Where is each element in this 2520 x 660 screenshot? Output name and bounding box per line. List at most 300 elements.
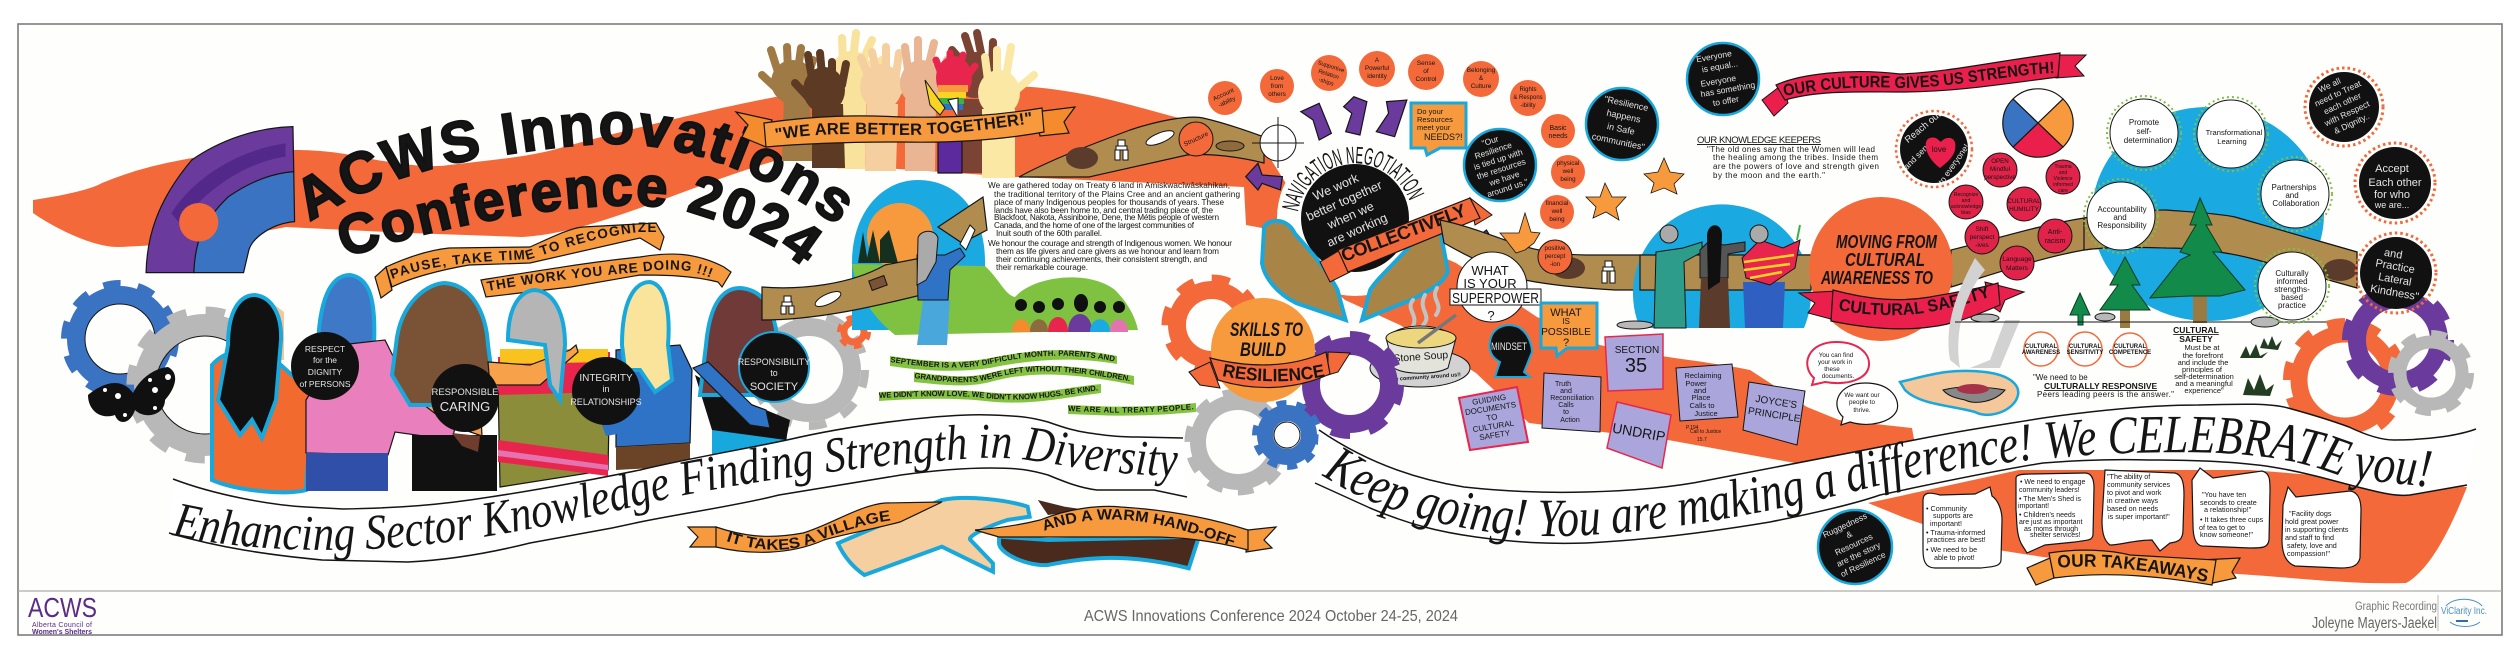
text: cultural safety definition: self-determination <box>2174 372 2234 381</box>
white circle: what is your superpower: SUPERPOWER <box>1452 290 1539 307</box>
grass tufts <box>2240 336 2282 396</box>
road segment over blue circle <box>2084 210 2357 288</box>
takeaway bubble: ability of community services: in creative ways <box>2107 496 2159 505</box>
bubble: positive perception <box>1538 240 1572 274</box>
bubble: love from others: Love <box>1270 75 1284 82</box>
footer: conference label: ACWS Innovations Conference 2024 October 24-25, 2024 <box>1084 608 1458 625</box>
bubble: trauma and violence informed care: and <box>2059 170 2067 176</box>
value: responsibility to society <box>738 332 810 402</box>
script banner: keep going: Keep going! You are making a difference! We CELEBRATE you! <box>1321 416 2432 544</box>
woman: black hair <box>212 295 385 492</box>
takeaway bubble: facility dogs: safety, love and <box>2287 541 2337 550</box>
black circle: our resilience: is tied up with <box>1472 147 1524 172</box>
hand: dark brown <box>795 53 846 167</box>
bubble: belonging and culture <box>1463 61 1499 97</box>
navigation negotiation arc text: NAVIGATION NEGOTIATION <box>1282 146 1424 212</box>
black circle: we work better together: better together <box>1304 178 1384 224</box>
value: responsibility to society: SOCIETY <box>750 381 799 393</box>
takeaway bubble: community leaders: • The Men's Shed is <box>2019 496 2082 503</box>
takeaway bubble: community supports: supports are <box>1933 511 1973 520</box>
black circle: ruggedness and resources: of Resilience <box>1839 549 1887 579</box>
ribbon: we are better together: "WE ARE BETTER TOGETHER!" <box>775 112 1031 138</box>
document: truth and reconciliation: Reconciliation <box>1550 395 1594 402</box>
value: responsibility to society: to <box>770 368 778 378</box>
takeaway bubble: community leaders: important! <box>2018 503 2049 510</box>
bubble: physical well being: being <box>1560 176 1576 183</box>
gear: purple skills <box>1300 335 1400 435</box>
hand: pink tan <box>900 40 947 170</box>
land acknowledgement text: them as life givers and care givers as we honour and learn from <box>996 247 1219 256</box>
text: cultural safety definition: and include the <box>2178 358 2228 367</box>
circle: moving from cultural awareness: CULTURAL <box>1845 250 1925 270</box>
bubble: trauma and violence informed care: Violence <box>2053 176 2073 182</box>
speech bubble: find your work: documents. <box>1822 373 1855 380</box>
document: truth and reconciliation <box>1542 373 1601 432</box>
takeaway bubble: ability of community services: to pivot and work <box>2107 488 2162 497</box>
bubble: accountability: Account <box>1212 87 1235 103</box>
takeaway bubble: ten seconds <box>2192 468 2270 548</box>
ground line with rocks <box>1617 313 2330 329</box>
bubble: supportive relationships: Supportive <box>1317 60 1345 74</box>
bubble: rights and responsibility: & Respons <box>1513 95 1543 101</box>
callout: what is possible: POSSIBLE <box>1541 327 1591 338</box>
document: undrip: UNDRIP <box>1611 420 1667 445</box>
document: guiding documents: TO <box>1486 412 1498 423</box>
bubble: cultural humility: HUMILITY <box>2009 206 2040 213</box>
footer: acws logo: Women's Shelters <box>32 629 92 636</box>
value: responsibility to society: RESPONSIBILITY <box>738 357 810 367</box>
footer: graphic recording credit: Joleyne Mayers-Jaekel <box>2312 615 2437 632</box>
note: call to justice reference: P.194 <box>1686 425 1699 431</box>
ribbon: collectively <box>1319 196 1493 283</box>
takeaway bubble: community leaders: • Children's needs <box>2019 512 2076 519</box>
circle: cultural sensitivity: SENSITIVITY <box>2067 350 2103 356</box>
bubble: shift perspectives: -ives <box>1975 242 1989 249</box>
circle: culturally informed strengths-based practice: informed <box>2276 277 2308 286</box>
document: guiding documents: DOCUMENTS <box>1464 400 1517 417</box>
stone soup bowl: and the community around us!! <box>1379 372 1461 384</box>
document: reclaiming power and place: Reclaiming <box>1684 371 1722 380</box>
steam gray band <box>1948 258 2020 368</box>
black circle: treat each other <box>2305 68 2383 146</box>
ribbon: collectively: COLLECTIVELY <box>1342 204 1463 260</box>
circle: promote self-determination: determination <box>2124 136 2172 145</box>
circle: cultural competence <box>2109 333 2151 367</box>
woman: maroon hair, blue skirt <box>693 288 790 455</box>
black circle: reach out: and send <box>1901 139 1933 171</box>
circle: cultural awareness <box>2022 332 2060 366</box>
land acknowledgement text: Blackfoot, Nakota, Assiniboine, Dene, the Métis people of western <box>994 213 1219 222</box>
bubble: rights and responsibility: -ibility <box>1520 103 1536 109</box>
black circle: ruggedness and resources: are the story <box>1835 539 1883 569</box>
three women <box>1654 225 1800 328</box>
bubble: sense of control: of <box>1423 68 1429 75</box>
takeaway bubble: ability of community services: "The ability of <box>2107 472 2150 481</box>
speech bubble: find your work: your work in <box>1818 359 1852 366</box>
land acknowledgement text: Canada, and the home of one of the largest communities of <box>994 221 1195 230</box>
black circle: we work better together: are working <box>1325 211 1390 250</box>
circle: partnerships and collaboration: and <box>2285 191 2299 200</box>
gear: blue left <box>65 284 175 394</box>
bubble: accountability: -ability <box>1217 95 1237 109</box>
black circle: resilience happens <box>1586 88 1658 160</box>
bubble: accountability <box>1208 81 1242 115</box>
blue sky circle with sun <box>852 180 1138 335</box>
circle: culturally informed strengths-based practice: Culturally <box>2275 269 2309 278</box>
circle: promote self-determination: self- <box>2136 127 2152 136</box>
bubble: shift perspectives: perspect <box>1970 234 1994 241</box>
skills gears <box>1162 274 1404 496</box>
takeaway bubble: community leaders: are just as important <box>2019 519 2082 526</box>
white circle: what is your superpower <box>1450 252 1541 323</box>
document: reclaiming power and place: Place <box>1692 393 1710 402</box>
document: truth and reconciliation: and <box>1560 388 1572 395</box>
bubble: language matters: Matters <box>2006 265 2029 272</box>
black circle: our resilience: the resources <box>1476 156 1527 181</box>
callout: do your resources meet your needs: NEEDS?! <box>1424 132 1463 142</box>
document: truth and reconciliation: Action <box>1560 417 1580 424</box>
bubble: anti-racism: racism <box>2045 238 2065 245</box>
takeaway bubble: ability of community services: based on needs <box>2107 504 2159 513</box>
bubble: recognize and acknowledge bias: Recognize <box>1954 192 1978 198</box>
circle: cultural awareness: CULTURAL <box>2025 344 2057 350</box>
icon: bison <box>2323 259 2357 281</box>
circle: cultural sensitivity <box>2067 332 2103 366</box>
hand: yellow back <box>831 33 882 168</box>
takeaway bubble: ten seconds: a relationship!" <box>2204 505 2252 514</box>
gear: orange skills <box>1165 278 1259 372</box>
bubble: sense of control <box>1408 54 1444 90</box>
document: guiding documents: CULTURAL <box>1472 419 1515 434</box>
circle: culturally informed strengths-based practice: based <box>2281 293 2303 302</box>
document: reclaiming power and place: and <box>1694 386 1706 395</box>
takeaway bubble: ten seconds: of tea to get to <box>2199 523 2245 532</box>
bubble: financial well being: being <box>1549 216 1565 223</box>
bubble: anti-racism <box>2038 219 2072 253</box>
black circle: ruggedness and resources: Resources <box>1833 531 1874 557</box>
circle: transformational learning <box>2194 97 2268 171</box>
ribbon: pause <box>374 222 665 299</box>
value: integrity in relationships: in <box>602 384 610 394</box>
bubble: a powerful identity: Powerful <box>1365 65 1389 72</box>
document: truth and reconciliation: to <box>1563 409 1569 416</box>
purple arrows <box>1246 97 1495 255</box>
circle: transformational learning: Learning <box>2217 137 2247 146</box>
black circle: lateral kindness: Lateral <box>2377 271 2412 289</box>
document: joyce's principle: JOYCE'S <box>1755 394 1798 411</box>
takeaway bubble: ten seconds: know someone!" <box>2200 530 2253 539</box>
knowledge keepers text: are the powers of love and strength given <box>1713 162 1879 171</box>
black circle: treat each other: with Respect <box>2322 98 2372 129</box>
big blue circle: wise practices <box>2092 107 2324 321</box>
circle: promote self-determination <box>2107 96 2181 170</box>
text: cultural safety definition: SAFETY <box>2179 334 2213 344</box>
knowledge keepers quote <box>1697 135 1879 180</box>
speech bubble: people to thrive: thrive. <box>1853 407 1871 414</box>
cupped hands <box>1262 221 1448 320</box>
circle: moving from cultural awareness <box>1809 197 1953 341</box>
bubble: belonging and culture: Belonging <box>1467 67 1496 74</box>
bubbles: resilience factors <box>1260 51 1585 279</box>
star icons <box>1500 158 1684 253</box>
takeaway bubble: community supports: practices are best! <box>1927 535 1986 544</box>
head: mindset: MINDSET <box>1491 341 1527 353</box>
takeaway bubble: facility dogs: "Facility dogs <box>2289 509 2332 518</box>
icon: butterfly <box>88 367 175 422</box>
knowledge keepers text: by the moon and the earth." <box>1713 171 1825 180</box>
black circle: ruggedness and resources: Ruggedness <box>1821 511 1869 540</box>
document: truth and reconciliation: Truth <box>1555 381 1571 388</box>
gear: purple right <box>2346 288 2450 392</box>
takeaway bubble: ability of community services: community services <box>2107 480 2171 489</box>
green ribbon line 2: GRANDPARENTS WERE LEFT WITHOUT THEIR CHILDREN. <box>914 366 1130 382</box>
skills to build label: SKILLS TO <box>1230 320 1303 341</box>
value: respect for the dignity of persons: DIGNITY <box>308 367 343 377</box>
value: respect for the dignity of persons <box>291 332 359 400</box>
bubble: trauma and violence informed care: care <box>2058 188 2068 194</box>
black circle: accept each other: for who <box>2374 189 2410 201</box>
value: integrity in relationships: RELATIONSHIPS <box>570 397 642 407</box>
black circle: resilience happens: "Resilience <box>1603 94 1649 113</box>
text: cultural safety definition: principles of <box>2182 365 2223 374</box>
icon: inukshuk <box>1602 261 1615 283</box>
elder woman with feather <box>917 225 975 345</box>
bubble: shift perspectives: Shift <box>1976 226 1989 233</box>
tree: medium <box>2100 257 2150 328</box>
takeaway bubble: community leaders: • We need to engage <box>2020 479 2085 486</box>
bubble: shift perspectives <box>1965 220 1999 254</box>
bubble: sense of control: Sense <box>1417 60 1436 67</box>
land acknowledgement text: Inuit south of the 60th parallel. <box>996 229 1102 238</box>
document: joyce's principle <box>1743 382 1805 445</box>
bubble: anti-racism: Anti- <box>2048 229 2063 236</box>
document: reclaiming power and place: Justice <box>1694 409 1718 418</box>
green ribbons: september message <box>878 350 1196 416</box>
black circle: lateral kindness: Kindness" <box>2369 283 2420 303</box>
woman: blue hair <box>306 275 455 491</box>
bubble: financial well being <box>1540 195 1574 229</box>
value: respect for the dignity of persons: for the <box>313 355 337 365</box>
footer: viclarity logo <box>2441 599 2487 626</box>
hand: peach <box>860 47 909 170</box>
bubble: supportive relationships: -ships <box>1318 77 1334 88</box>
white circle: what is your superpower: ? <box>1487 308 1495 323</box>
ribbon: we are better together <box>734 106 1076 148</box>
quote: culturally responsive: "We need to be <box>2033 373 2088 382</box>
steam <box>1411 288 1439 328</box>
black circle: resilience happens: in Safe <box>1606 121 1636 137</box>
knowledge keepers heading: OUR KNOWLEDGE KEEPERS <box>1697 135 1821 146</box>
takeaway bubble: community leaders: community leaders! <box>2019 487 2080 494</box>
note: call to justice reference: Call to Justice <box>1690 429 1721 435</box>
bubble: supportive relationships <box>1311 55 1347 91</box>
gear: gray left <box>131 311 279 459</box>
speech bubble: find your work <box>1807 342 1869 385</box>
black circle: ruggedness and resources: & <box>1844 528 1854 540</box>
bubble: belonging and culture: Culture <box>1471 83 1492 90</box>
land acknowledgement text <box>988 181 1240 272</box>
takeaway bubble: community supports: • Community <box>1926 504 1967 513</box>
footer: acws logo: ACWS <box>28 592 97 623</box>
ribbon: it takes a village <box>686 501 942 553</box>
black circle: reach out: love <box>1932 145 1947 154</box>
orange swoosh: takeaways band <box>1868 470 2467 583</box>
circle: skills to build <box>1211 298 1315 402</box>
ribbon: our takeaways: OUR TAKEAWAYS <box>2058 554 2208 582</box>
icon: basket on road <box>1216 141 1244 151</box>
black circle: everyone is equal: has something <box>1700 80 1756 99</box>
takeaway bubble: community supports <box>1923 487 2002 568</box>
land acknowledgement text: their remarkable courage. <box>996 263 1088 272</box>
speech bubble: people to thrive: We want our <box>1844 392 1880 399</box>
icon: basket <box>869 276 887 290</box>
black circle: we work better together: when we <box>1324 199 1376 232</box>
circle: accountability and responsibility: and <box>2113 213 2127 222</box>
takeaway bubble: community leaders <box>2016 473 2094 553</box>
black circle: treat each other: & Dignity.. <box>2332 111 2371 136</box>
takeaways speech bubbles <box>1923 468 2361 568</box>
document: reclaiming power and place <box>1676 364 1738 421</box>
speech bubble: people to thrive <box>1837 383 1898 425</box>
bubble: a powerful identity <box>1359 51 1395 87</box>
ribbon: our culture gives us strength: OUR CULTURE GIVES US STRENGTH! <box>1784 62 2054 96</box>
gear: orange right <box>2287 322 2403 438</box>
circle: cultural awareness: AWARENESS <box>2022 350 2060 356</box>
takeaway bubble: ability of community services: is super important!" <box>2108 512 2170 521</box>
bubble: financial well being: well <box>1551 208 1562 215</box>
takeaway bubble: community leaders: shelter services! <box>2030 532 2081 539</box>
text: cultural safety definition: Must be at <box>2184 343 2220 352</box>
value: integrity in relationships: INTEGRITY <box>579 373 633 384</box>
black circle: our resilience: around us." <box>1486 176 1529 199</box>
crosshair compass <box>1252 117 1304 168</box>
bubble: belonging and culture: & <box>1479 75 1484 82</box>
circle: accountability and responsibility: Accountability <box>2097 205 2147 214</box>
white circles: principles <box>2084 96 2332 323</box>
document: section 35 <box>1605 334 1663 391</box>
bubble: positive perception: positive <box>1545 245 1566 252</box>
tree: large <box>2150 198 2245 323</box>
woman: green dress <box>1654 225 1702 328</box>
bubble: a powerful identity: identity <box>1367 73 1388 80</box>
woman: blonde, blue sweater <box>600 282 692 470</box>
value: responsible caring: CARING <box>440 399 490 414</box>
black circle: reach out <box>1896 109 1972 187</box>
bubble: open mindful perspective: Mindful <box>1990 166 2010 173</box>
black circle: treat each other: each other <box>2322 90 2363 116</box>
speech bubble: find your work: these <box>1824 366 1840 373</box>
group of women seen from behind <box>212 275 810 492</box>
knowledge keepers text: "The old ones say that the Women will lead <box>1707 145 1875 154</box>
callout: do your resources meet your needs <box>1411 103 1466 155</box>
woman: brown hair <box>392 283 497 491</box>
knowledge keepers text: the healing among the tribes. Inside them <box>1713 153 1878 162</box>
ribbon: our takeaways <box>2026 550 2241 586</box>
hand holding bowl <box>1900 371 2018 415</box>
ribbon: pause: PAUSE, TAKE TIME TO RECOGNIZE <box>390 222 656 279</box>
callout: do your resources meet your needs: Resources <box>1417 115 1453 124</box>
document: guiding documents: GUIDING <box>1471 393 1507 407</box>
road segment in front of the blue circle <box>1640 255 1811 290</box>
circle: moving from cultural awareness: MOVING FROM <box>1836 232 1938 252</box>
bubble: supportive relationships: Relation <box>1317 69 1339 81</box>
black circle: everyone is equal: Everyone <box>1695 48 1733 64</box>
takeaway bubble: community supports: • Trauma-informed <box>1926 528 1985 537</box>
document: section 35: 35 <box>1625 355 1647 377</box>
bubble: basic needs <box>1541 114 1575 148</box>
text: cultural safety definition: the forefront <box>2183 351 2224 360</box>
takeaway bubble: ability of community services <box>2102 470 2184 551</box>
bubble: financial well being: financial <box>1546 200 1568 207</box>
bubble: rights and responsibility: Rights <box>1519 87 1537 93</box>
bubble: love from others <box>1260 69 1294 103</box>
green ribbon line 4: WE ARE ALL TREATY PEOPLE. <box>1068 404 1194 413</box>
bubble: a powerful identity: A <box>1375 57 1380 64</box>
speech bubble: find your work: You can find <box>1819 352 1854 359</box>
orange swoosh: upper ribbon <box>33 86 1915 463</box>
path: road continuation with eagle feather <box>938 197 987 243</box>
callout: do your resources meet your needs: Do your <box>1417 107 1444 116</box>
road: middle brown path <box>1440 220 1811 290</box>
icon: feather on road <box>1144 128 1176 148</box>
footer: viclarity logo: ViClarity Inc. <box>2441 606 2487 617</box>
document: guiding documents: SAFETY <box>1479 428 1511 442</box>
text: cultural safety definition: and a meaningful <box>2175 379 2233 388</box>
raised hands <box>762 33 1034 177</box>
land acknowledgement text: the traditional territory of the Plains Cree and an ancient gathering <box>994 190 1240 199</box>
document: undrip <box>1607 402 1671 468</box>
document: reclaiming power and place: Power <box>1685 379 1707 388</box>
seated children <box>1012 294 1128 332</box>
logo arc: purple and blue shape <box>146 127 295 273</box>
bubble: open mindful perspective: OPEN <box>1991 158 2009 165</box>
bubble: structure: Structure <box>1183 131 1210 148</box>
icon: bison on road <box>1066 147 1098 169</box>
black circle: everyone is equal: to offer <box>1712 94 1740 108</box>
woman: gray hair, striped sweater <box>488 290 610 487</box>
skills to build label: BUILD <box>1240 340 1286 361</box>
speech bubble: people to thrive: people to <box>1849 399 1875 406</box>
value: integrity in relationships <box>570 357 642 425</box>
ribbon: cultural safety: CULTURAL SAFETY <box>1840 285 1987 316</box>
takeaway bubble: facility dogs: compassion!" <box>2287 549 2330 558</box>
value: respect for the dignity of persons: RESPECT <box>305 344 345 354</box>
ribbon: cultural safety <box>1798 281 2026 330</box>
bubble: open mindful perspective <box>1983 153 2017 187</box>
text: cultural safety definition <box>2173 325 2234 395</box>
icon: feather <box>813 289 843 309</box>
bubble: open mindful perspective: perspective <box>1984 174 2016 181</box>
black circle: reach out: Reach out <box>1903 109 1943 146</box>
black circle: we work better together: We work <box>1311 171 1361 203</box>
takeaway bubble: facility dogs <box>2282 487 2361 568</box>
ribbon: resilience: RESILIENCE <box>1223 364 1324 382</box>
bubble: cultural humility <box>2007 187 2041 221</box>
trees on the hill <box>858 230 898 263</box>
circle: cultural sensitivity: CULTURAL <box>2069 344 2101 350</box>
white backdrop behind negotiation circle <box>1277 140 1433 296</box>
bubble: basic needs: Basic <box>1549 125 1567 132</box>
script banner: enhancing sector knowledge: Enhancing Sector Knowledge Finding Strength in Diversity <box>171 424 1178 560</box>
document: truth and reconciliation: Calls <box>1558 402 1574 409</box>
ribbon: it takes a village: IT TAKES A VILLAGE <box>727 510 890 550</box>
black circle: our resilience: Resilience <box>1473 140 1513 161</box>
land acknowledgement text: lands have also been home to, and central trading place of, the <box>994 206 1213 215</box>
icon: inukshuk <box>781 296 794 314</box>
circle: moving from cultural awareness: AWARENESS TO <box>1820 268 1933 288</box>
woman: striped shawl, blue skirt <box>1742 225 1800 328</box>
gear: blue skills <box>1255 403 1319 467</box>
